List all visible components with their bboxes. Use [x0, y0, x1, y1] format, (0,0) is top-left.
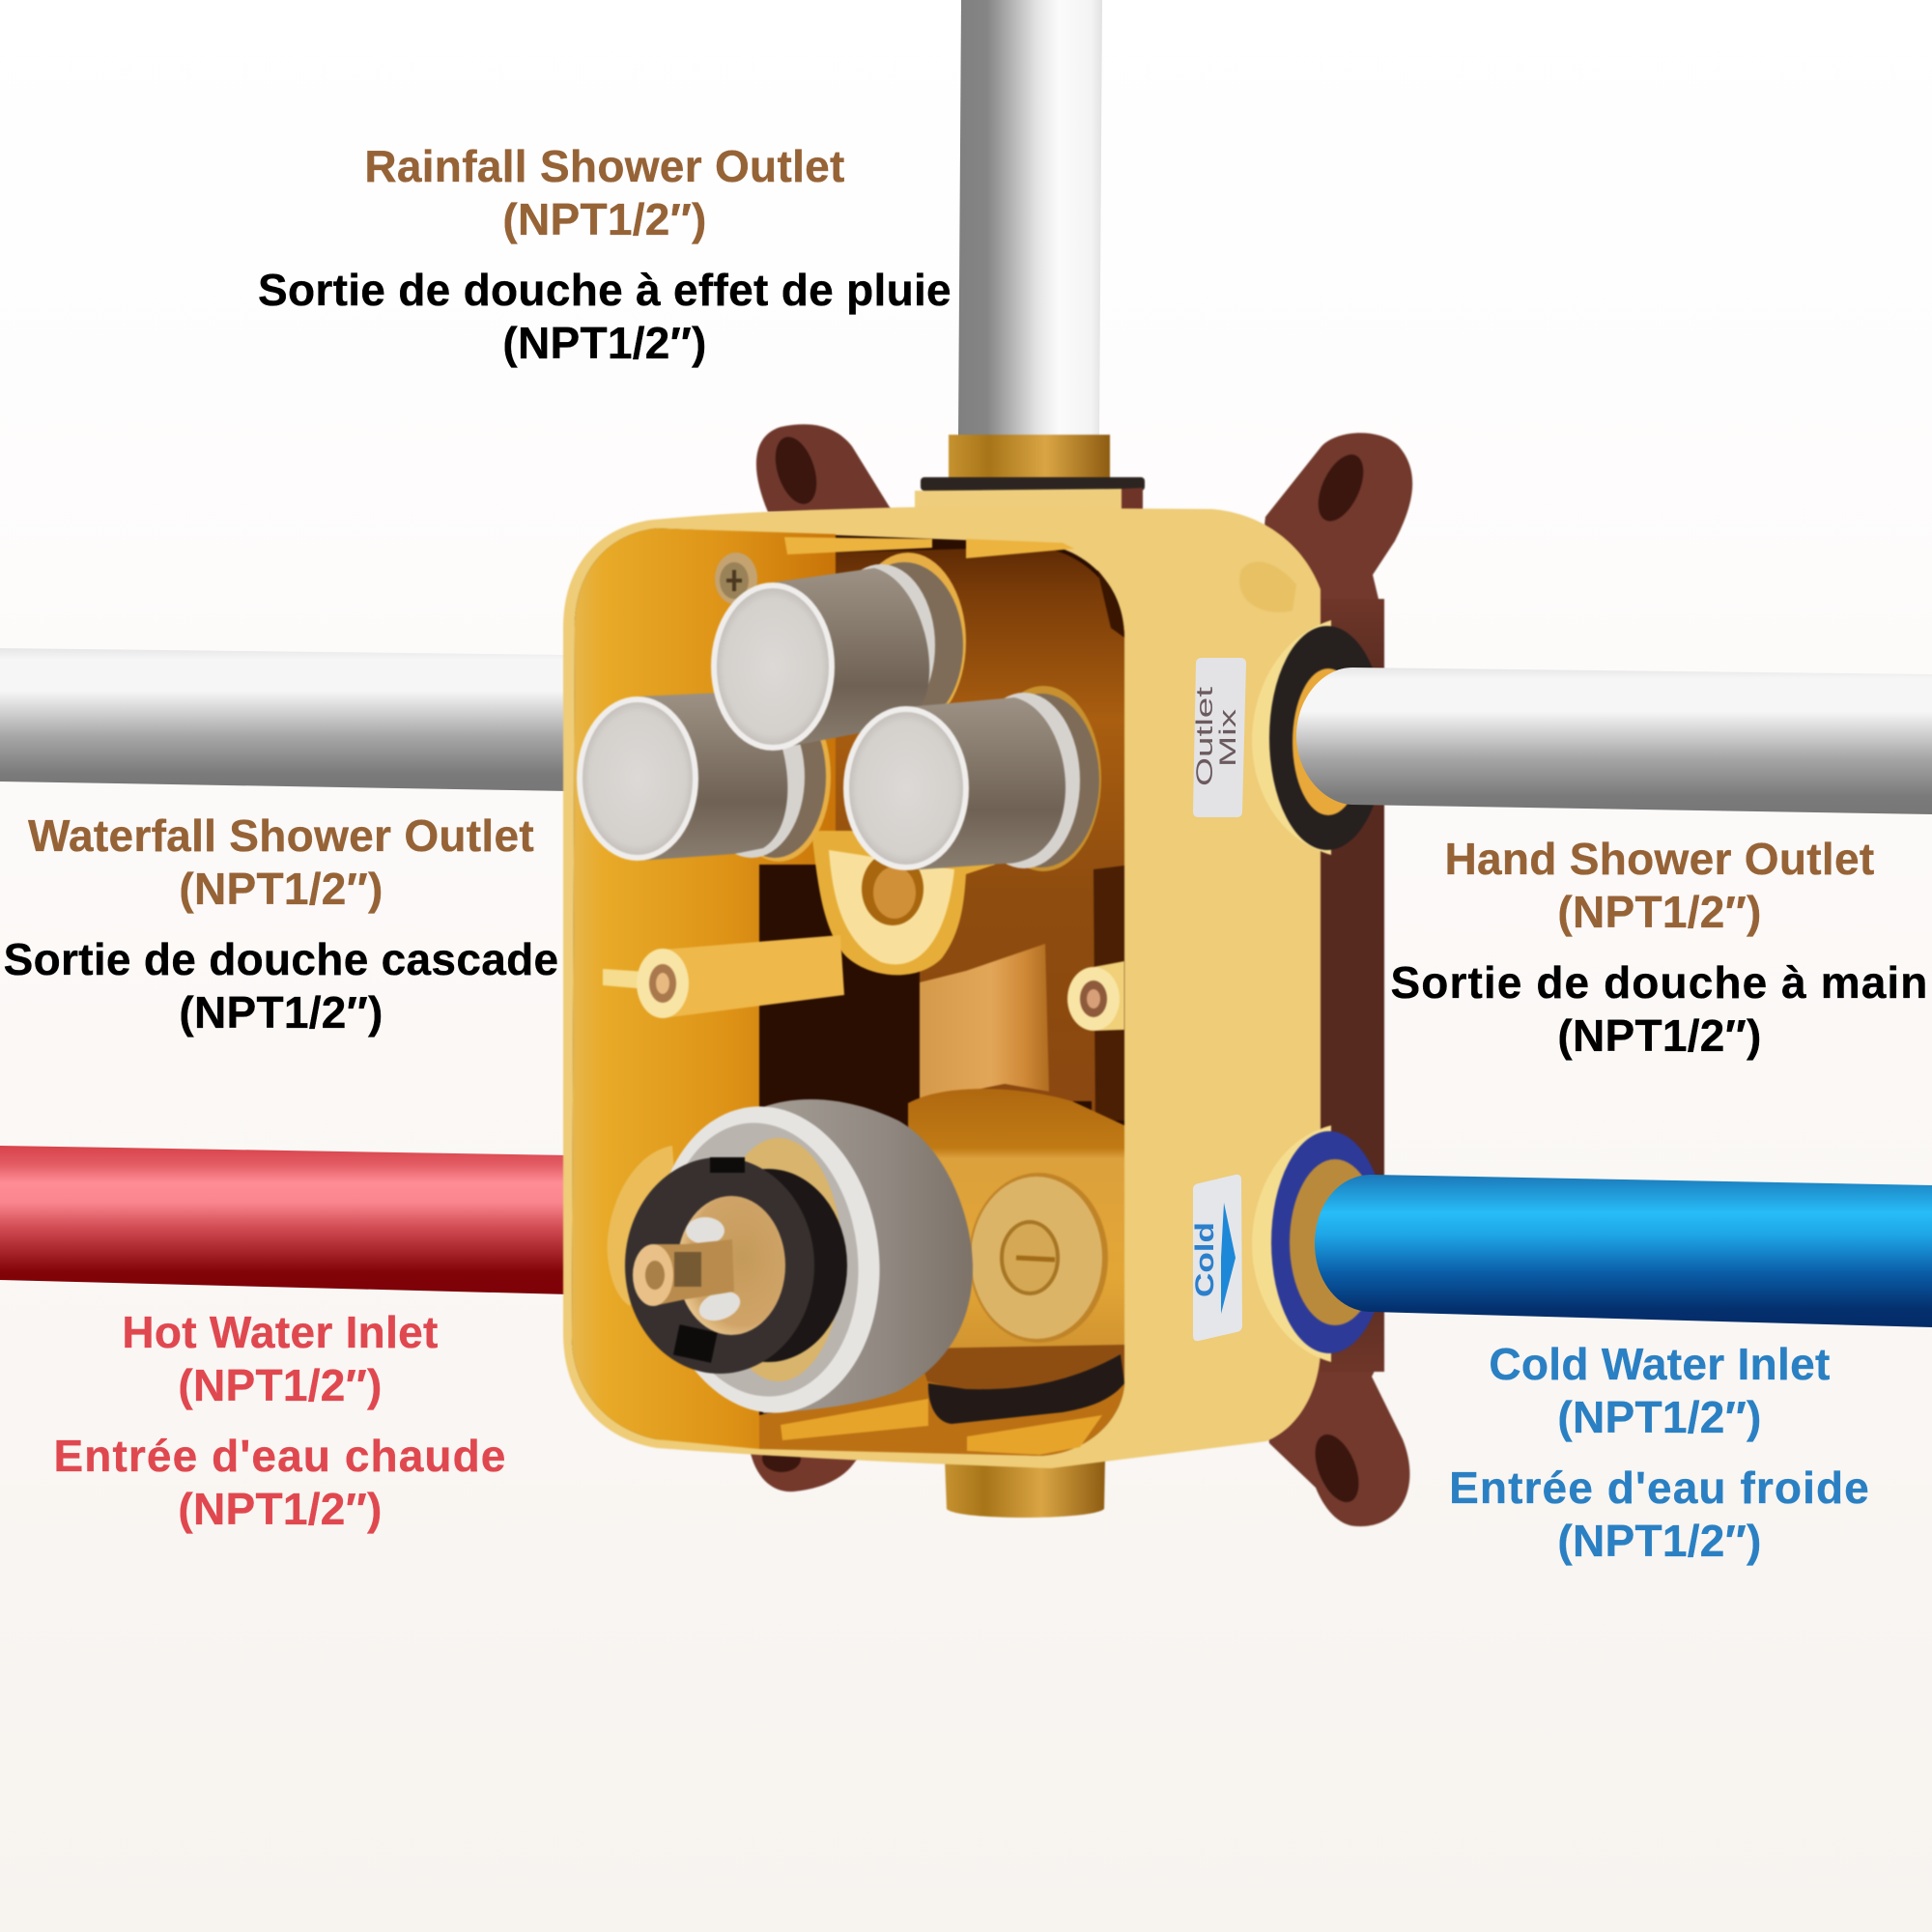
- label: hand shower outlet: Hand Shower Outlet: [1445, 834, 1874, 884]
- knob: left: [577, 692, 831, 862]
- brass collar: [949, 435, 1110, 483]
- interior base: [572, 528, 1124, 1456]
- box shade patch: [1239, 561, 1296, 612]
- bottom tab left: [781, 1399, 928, 1440]
- label: waterfall shower outlet: (NPT1/2″): [179, 864, 384, 914]
- lug: bottom left: [750, 1449, 860, 1492]
- label: hand shower outlet: (NPT1/2″): [1557, 1010, 1762, 1061]
- label: rainfall shower outlet: (NPT1/2″): [502, 318, 707, 368]
- label: hot water inlet: Entrée d'eau chaude: [54, 1431, 506, 1481]
- label: cold water inlet: (NPT1/2″): [1557, 1392, 1762, 1442]
- fitting: upper right (hand shower): [1252, 620, 1385, 855]
- gold washer: [811, 831, 995, 975]
- arrow: [1221, 1203, 1236, 1314]
- fitting: lower right (cold): [1252, 1125, 1387, 1362]
- yellow rim: [1252, 1125, 1331, 1362]
- label: hand shower outlet: Sortie de douche à main: [1391, 957, 1928, 1008]
- lower brass shadow strip: [918, 1345, 1124, 1391]
- white clip bottom: [696, 1286, 744, 1326]
- label: rainfall shower outlet: Sortie de douche à effet de pluie: [258, 265, 952, 315]
- white front ring: [639, 1095, 895, 1424]
- sticker: Outlet Mix: Outlet: [1192, 686, 1218, 786]
- clip notch top: [710, 1157, 745, 1173]
- label: hot water inlet: Hot Water Inlet: [122, 1307, 439, 1357]
- gold ring inside well: [715, 1138, 842, 1381]
- label: rainfall shower outlet: [258, 141, 952, 368]
- lug: top left: [756, 424, 893, 512]
- label: hot water inlet: (NPT1/2″): [178, 1360, 383, 1410]
- pipe: cold water inlet (right, blue): [1315, 1175, 1932, 1327]
- yellow rim: [1252, 620, 1331, 855]
- knob: top: [711, 553, 966, 751]
- upper brass body: [836, 547, 1124, 1121]
- pipe: rainfall outlet (top, grey): [958, 0, 1102, 437]
- post right: [1067, 961, 1124, 1031]
- sticker: Outlet Mix: Mix: [1215, 709, 1241, 767]
- strip: [1321, 599, 1384, 1372]
- corner screw: [715, 553, 757, 605]
- label: waterfall shower outlet: Sortie de douche cascade: [4, 934, 558, 984]
- brass bar: [920, 944, 1049, 1101]
- blue seal: [1271, 1131, 1387, 1353]
- dark strip right of bar: [1094, 866, 1124, 1121]
- stem tip: [633, 1244, 673, 1306]
- top tab right: [966, 539, 1074, 558]
- top brass collar with gasket: [915, 435, 1145, 512]
- sticker: Cold: Cold: [1190, 1222, 1219, 1297]
- label: cold water inlet: Cold Water Inlet: [1489, 1339, 1831, 1389]
- brass inner: [1293, 668, 1364, 815]
- silver cylinder: [763, 1099, 973, 1413]
- pipe: hot water inlet (left, red): [0, 1146, 570, 1294]
- white clip top: [686, 1217, 724, 1244]
- dark corner behind upper brass: [1097, 570, 1124, 638]
- gasket: [921, 477, 1145, 491]
- label: rainfall shower outlet: (NPT1/2″): [502, 194, 707, 244]
- flange: [915, 489, 1122, 512]
- label: waterfall shower outlet: (NPT1/2″): [179, 987, 384, 1037]
- label: cold water inlet: Entrée d'eau froide: [1449, 1463, 1870, 1513]
- black seal: [1269, 626, 1385, 850]
- black seal block: [928, 1354, 1124, 1424]
- label: hot water inlet: (NPT1/2″): [178, 1484, 383, 1534]
- label: rainfall shower outlet: Rainfall Shower Outlet: [364, 141, 845, 191]
- sticker: Outlet Mix: [1192, 658, 1246, 817]
- box opening interior: [572, 528, 1124, 1456]
- brass inner: [1290, 1159, 1380, 1325]
- label: hot water inlet: [54, 1307, 506, 1534]
- label: hand shower outlet: (NPT1/2″): [1557, 887, 1762, 937]
- washer hole: [862, 852, 923, 925]
- label: waterfall shower outlet: Waterfall Shower Outlet: [28, 810, 534, 861]
- plug with screw: [969, 1173, 1108, 1343]
- top tab left: [784, 537, 932, 554]
- rear brass ring of cartridge: [608, 1146, 676, 1306]
- hole: bottom right lug: [1307, 1429, 1367, 1508]
- pipe: waterfall outlet (left, grey): [0, 648, 570, 791]
- floor: [759, 1348, 1124, 1456]
- lug: top right and bottom right with strip: [1256, 433, 1412, 1526]
- hole: bottom left lug: [762, 1445, 801, 1472]
- hole: top right lug: [1309, 447, 1373, 528]
- screw head: [1002, 1222, 1058, 1293]
- box body (yellow shell): [563, 507, 1321, 1468]
- bottom brass stub: [945, 1459, 1105, 1518]
- lower brass body: [908, 1089, 1124, 1357]
- black ring: [625, 1157, 814, 1374]
- knob: right: [843, 686, 1101, 871]
- dark ring behind: [689, 1169, 847, 1362]
- inner well: [651, 1113, 871, 1406]
- clip notch bottom: [673, 1324, 718, 1363]
- gold inner: [677, 1196, 785, 1335]
- label: cold water inlet: (NPT1/2″): [1557, 1516, 1762, 1566]
- pipe: hand shower outlet (right, grey): [1296, 668, 1932, 814]
- label: hand shower outlet: [1391, 834, 1928, 1061]
- label: waterfall shower outlet: [4, 810, 558, 1037]
- stem knurl: [674, 1252, 701, 1287]
- mounting plate and lugs (brown): [750, 424, 1412, 1526]
- post left: [603, 935, 844, 1018]
- hole: top left lug: [768, 432, 824, 509]
- dial cartridge: [625, 1095, 973, 1424]
- label: cold water inlet: [1449, 1339, 1870, 1566]
- stem: [653, 1239, 734, 1306]
- bottom tab right: [967, 1415, 1102, 1455]
- left inner wall: [572, 528, 836, 1449]
- sticker: Cold: [1190, 1175, 1242, 1341]
